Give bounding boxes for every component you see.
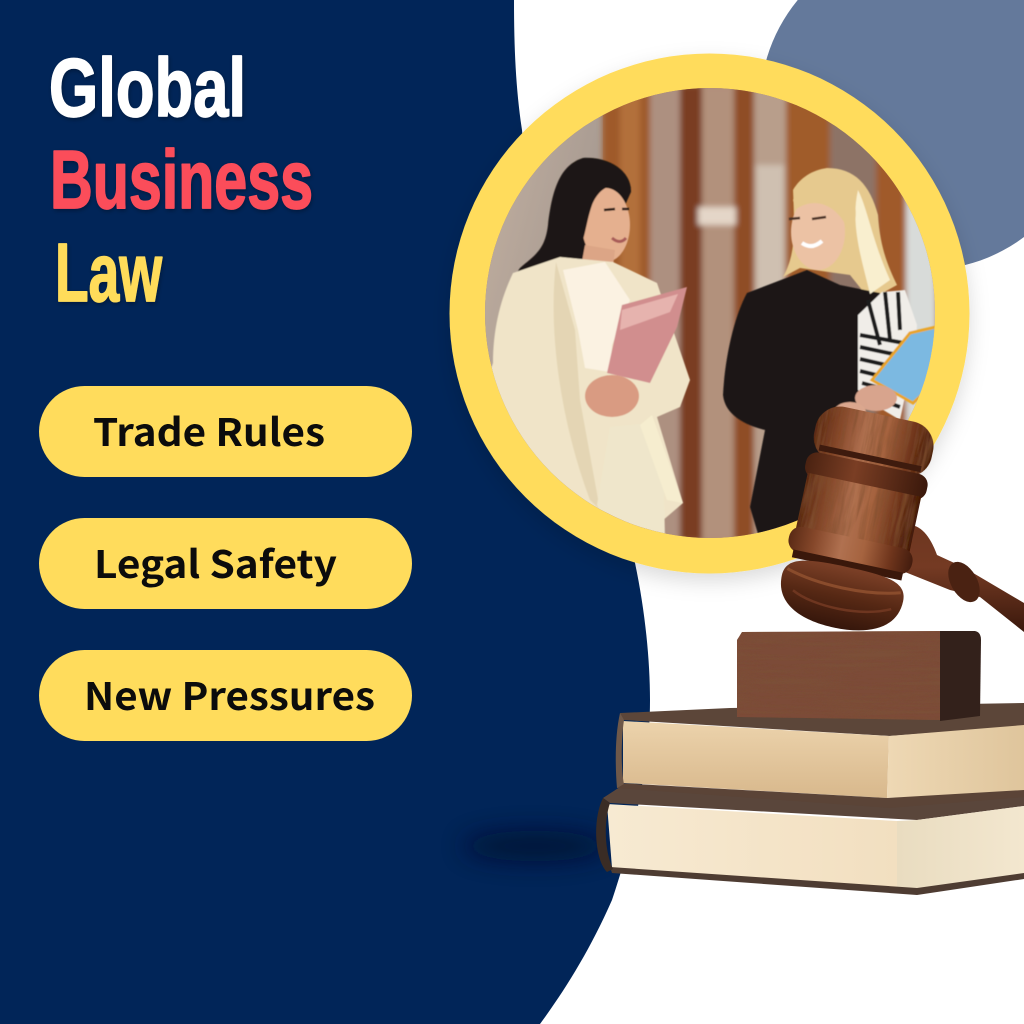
gavel head: [773, 401, 941, 641]
woman left: pink folder: [607, 287, 687, 383]
woman right: hair highlight: [855, 190, 890, 294]
woman right: smile: [802, 241, 822, 246]
pill: Trade Rules: [39, 386, 412, 477]
gavel upper groove: [819, 445, 922, 472]
upper book: [616, 703, 1024, 808]
woman left: jacket shadow folds: [554, 262, 600, 510]
woman left: folder highlight: [620, 294, 678, 330]
woman left: face: [582, 188, 630, 262]
decorative slate-blue circle: [760, 0, 1024, 270]
woman left: hair side: [574, 158, 631, 256]
gavel: [773, 401, 1024, 641]
woman right: dark jacket: [723, 270, 880, 534]
woman left: jacket right flap: [644, 417, 683, 502]
gavel upper ring: [803, 450, 930, 502]
gavel groove: [792, 549, 903, 581]
gavel handle: [905, 525, 1024, 632]
woman left: hair: [518, 157, 632, 272]
woman left: blouse bow: [563, 262, 630, 372]
woman left: smile: [612, 238, 626, 242]
lower book: [596, 785, 1024, 895]
pill: Legal Safety: [39, 518, 412, 609]
woman right: hair back: [783, 168, 897, 300]
pill: New Pressures: New Pressures: [84, 666, 375, 721]
woman left: neck: [582, 244, 614, 263]
woman right: lower hand: [835, 401, 866, 412]
title word: Business: Business: [50, 133, 313, 226]
pill: New Pressures: [39, 650, 412, 741]
shadow under books on navy: [463, 831, 607, 861]
gavel highlight line: [786, 569, 901, 600]
woman right: hand: [855, 385, 897, 411]
pill: Legal Safety: Legal Safety: [94, 534, 337, 589]
sounding block: [737, 631, 981, 721]
books stacked: [596, 703, 1024, 895]
navy background shape: [0, 0, 650, 1024]
photo: two businesswomen walking in a corridor: [480, 85, 936, 550]
gavel top cap: [809, 402, 938, 482]
woman right: blue folder: [872, 327, 936, 403]
gavel bottom cap: [773, 554, 908, 640]
gavel lower ring: [786, 525, 915, 576]
woman left: hands: [585, 375, 639, 417]
title word: Global: Global: [49, 41, 246, 134]
woman left: trousers: [597, 500, 666, 534]
title word: Law: Law: [55, 226, 162, 319]
title: [49, 41, 313, 319]
woman left: cream jacket: [492, 256, 691, 519]
woman right: fringe: [792, 194, 856, 220]
gavel face line: [791, 588, 891, 620]
gavel handle ring: [942, 556, 986, 608]
photo background: wall and wood panels: [485, 85, 936, 541]
people: [480, 158, 936, 550]
gavel body: [795, 473, 921, 557]
pill: Trade Rules: Trade Rules: [93, 402, 325, 457]
woman left: eyes: [604, 209, 629, 210]
yellow ring around photo: [450, 54, 970, 574]
woman right: face: [790, 203, 845, 270]
woman right: striped top: [858, 290, 917, 420]
woman right: eyes: [789, 217, 826, 219]
